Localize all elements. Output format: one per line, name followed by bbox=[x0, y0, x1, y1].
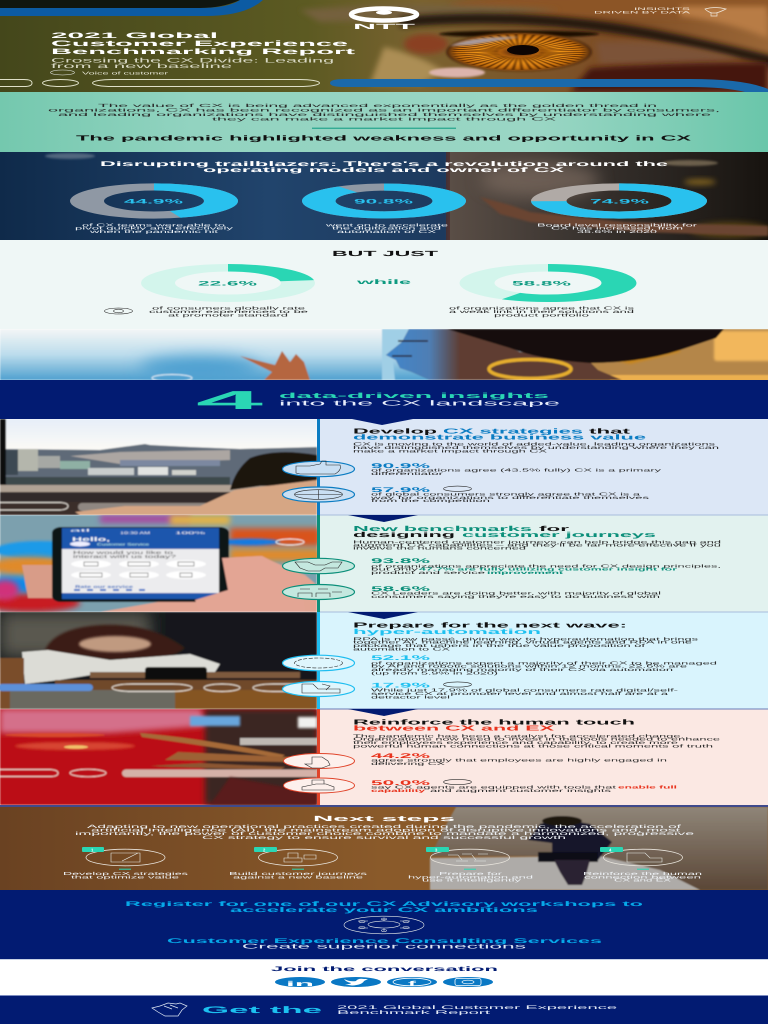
heading: Next steps bbox=[313, 814, 455, 823]
photo: hand on red car bbox=[0, 709, 322, 805]
blue arc bottom right bbox=[330, 79, 768, 92]
stat: 52.1%: by AI and robotic solutions within 12 months. 22.6% are bbox=[371, 664, 689, 669]
step 2 bbox=[229, 847, 367, 879]
stat: 50.0%: and augment customer insights bbox=[430, 788, 611, 793]
heading: New benchmarks bbox=[353, 524, 532, 533]
icon: self-service bbox=[282, 682, 354, 696]
intro text bbox=[48, 103, 720, 122]
heading bbox=[353, 426, 646, 441]
phone: Customer Service bbox=[97, 542, 149, 546]
panel: introduction bbox=[0, 92, 768, 152]
services name bbox=[167, 938, 603, 950]
icon: agent bbox=[284, 778, 354, 793]
stat: 50.0%: capability bbox=[371, 788, 427, 793]
stat: 52.1%: 52.1% bbox=[371, 655, 430, 662]
donut: 58.8% bbox=[477, 268, 619, 298]
donut: 90.8%: 90.8% bbox=[354, 198, 414, 206]
stat: 57.9%: from the competition bbox=[371, 498, 492, 503]
heading: demonstrate business value bbox=[353, 432, 646, 441]
step 4: Reinforce the human bbox=[583, 871, 704, 876]
panel: insight 4 bbox=[284, 708, 768, 805]
body text: artificial intelligence (AI), the mainstream adoption of disruptive innovations and, most bbox=[91, 827, 682, 833]
icon: gears bbox=[282, 655, 354, 671]
body text: augment CX capabilities – and they'll be far more effective if you bbox=[353, 542, 722, 548]
body text: make a market impact through CX bbox=[353, 448, 547, 453]
caption two: automation of CX bbox=[337, 229, 436, 234]
stat: 58.6%: consumers saying they're easy to do business with bbox=[371, 594, 662, 599]
panel: join the conversation bbox=[0, 959, 768, 995]
icon: network bbox=[344, 916, 424, 934]
subtitle bbox=[51, 58, 333, 68]
body text bbox=[353, 442, 720, 453]
donut: 90.8% bbox=[319, 187, 449, 215]
caption one: when the pandemic hit bbox=[90, 229, 220, 234]
body text bbox=[353, 539, 722, 551]
stat: 50.0%: enable full bbox=[618, 784, 677, 790]
body text: have distinguished themselves by understanding where they can bbox=[353, 445, 720, 450]
body text: CX is moving to the world of added-value, leading organizations bbox=[353, 442, 717, 446]
phone: How would you like to bbox=[73, 550, 174, 555]
photo: woman in profile bbox=[0, 329, 768, 384]
caption right: of organizations agree that CX is bbox=[449, 306, 634, 310]
connector word: while bbox=[354, 279, 412, 286]
step 4: connection between bbox=[584, 874, 703, 879]
body text: CX strategy to ensure survival and successful growth bbox=[202, 835, 567, 841]
heading bbox=[353, 620, 627, 636]
stat: 44.2% bbox=[371, 753, 669, 766]
subtitle: Crossing the CX Divide: Leading bbox=[51, 58, 335, 64]
phone: Rate our service bbox=[75, 584, 134, 589]
stat: 50.0%: 50.0% bbox=[371, 780, 430, 787]
heading: operating models and owner of CX bbox=[203, 167, 565, 174]
decorative pills bbox=[0, 684, 323, 692]
photo: phone in hand bbox=[0, 515, 320, 612]
stat: 93.8%: improvement bbox=[487, 570, 565, 575]
donut: 74.9% bbox=[549, 187, 689, 215]
services name: Customer Experience Consulting Services bbox=[167, 938, 603, 945]
phone: atl bbox=[70, 528, 91, 532]
stat: 57.9%: 57.9% bbox=[371, 487, 430, 494]
stat: 17.9%: 17.9% bbox=[371, 682, 430, 690]
body text: automation to CX bbox=[353, 646, 450, 651]
stat: 90.9%: of organizations agree (43.5% fully) CX is a primary bbox=[371, 468, 664, 473]
body text bbox=[353, 636, 700, 651]
body text bbox=[76, 824, 694, 840]
caption two: the digitization and bbox=[332, 226, 443, 231]
heading: Register for one of our CX Advisory workshops to bbox=[125, 901, 643, 908]
phone: interact with us today? bbox=[73, 554, 177, 559]
stat: 93.8%: of organizations appreciate the need for CX design principles, bbox=[371, 563, 721, 568]
caption two: went on to accelerate bbox=[326, 222, 450, 227]
phone bbox=[52, 527, 229, 602]
caption three: CX has increased, from bbox=[551, 226, 684, 231]
decorative pills bbox=[0, 80, 320, 86]
heading: that bbox=[589, 426, 632, 436]
body text: importantly, the power of customer choice combine to mandate a harmonized, progressive bbox=[75, 831, 695, 837]
photo: person walking by wall bbox=[430, 807, 768, 890]
heading bbox=[100, 161, 669, 174]
panel: footer download bbox=[0, 995, 768, 1024]
panel: disrupting trailblazers bbox=[0, 152, 768, 240]
heading: between CX and EX bbox=[353, 724, 555, 733]
stat: 17.9%: service CX at promoter level and almost half are at a bbox=[371, 691, 670, 696]
body text: their employees experience and capability, to create more bbox=[353, 740, 679, 745]
caption three: Board level responsibility for bbox=[537, 222, 699, 227]
heading: for bbox=[539, 524, 570, 533]
stat: 93.8%: product and service bbox=[371, 570, 487, 575]
stat: 90.9%: 90.9% bbox=[371, 463, 430, 470]
heading: Develop bbox=[353, 426, 439, 436]
stat: 17.9%: While just 17.9% of global consumers rate digital/self- bbox=[371, 688, 680, 693]
photo: woman at window bbox=[0, 419, 317, 515]
heading: customer journeys bbox=[462, 530, 656, 539]
caption right bbox=[449, 306, 636, 317]
panel: four insights banner bbox=[0, 380, 768, 419]
caption two bbox=[326, 223, 448, 233]
services name: Create superior connections bbox=[242, 944, 528, 950]
body text: involve the humans concerned bbox=[353, 546, 527, 551]
stat: 17.9%: detractor level bbox=[371, 694, 450, 699]
earring bbox=[489, 360, 571, 378]
donut: 58.8%: 58.8% bbox=[512, 280, 572, 288]
heading: hyper-automation bbox=[353, 627, 541, 636]
heading: BUT JUST bbox=[332, 249, 439, 258]
donut: 22.6% bbox=[158, 268, 298, 298]
stat: 90.9%: differentiator bbox=[371, 471, 445, 476]
NTT logo: NTT bbox=[353, 22, 417, 31]
panel: insight 3 bbox=[282, 612, 768, 709]
step 1: that optimize value bbox=[71, 874, 181, 879]
insights driven by data: INSIGHTS bbox=[634, 7, 692, 11]
heading: Disrupting trailblazers: There's a revolution around the bbox=[100, 161, 669, 168]
banner text: into the CX landscape bbox=[279, 398, 560, 408]
body text bbox=[353, 733, 721, 748]
step 1 bbox=[63, 847, 188, 879]
banner text: data-driven insights bbox=[279, 391, 549, 400]
heading: Prepare for the next wave: bbox=[353, 620, 627, 629]
stat: 90.9% bbox=[371, 463, 664, 476]
heading bbox=[353, 524, 656, 539]
heading: Join the conversation bbox=[271, 966, 498, 973]
icon: twitter bbox=[331, 977, 381, 987]
caption left: at promoter standard bbox=[168, 312, 290, 317]
step 1: 1 bbox=[91, 847, 94, 852]
head wrap bbox=[447, 329, 724, 363]
phone: 100% bbox=[175, 531, 205, 535]
subtitle: from a new baseline bbox=[51, 63, 233, 70]
step 3: hyper-automation and bbox=[408, 874, 535, 879]
caption three: 35.6% in 2020 bbox=[577, 229, 659, 234]
icon: pointing hand bbox=[284, 754, 354, 768]
stat: 57.9% bbox=[371, 486, 649, 503]
body text: Human-centered customer journeys can help bridge this gap and bbox=[353, 539, 722, 544]
caption right: product portfolio bbox=[494, 312, 591, 317]
stat: 44.2%: agree strongly that employees are highly engaged in bbox=[371, 758, 669, 763]
icon: handshake bbox=[282, 558, 354, 574]
heading: designing bbox=[353, 530, 455, 539]
stat: 58.6%: CX Leaders are doing better, with majority of global bbox=[371, 590, 661, 595]
stat: 58.6%: 58.6% bbox=[371, 586, 430, 593]
stat: 44.2%: delivering CX bbox=[371, 761, 445, 766]
eye photograph bbox=[300, 0, 768, 92]
step 2: 2 bbox=[263, 847, 266, 852]
icon: globe bbox=[282, 487, 354, 502]
banner text bbox=[279, 391, 560, 408]
voice of customer tag: Voice of customer bbox=[82, 70, 170, 75]
photo: woman at laptop bbox=[0, 612, 323, 709]
body text: RPA is now passé, giving way to hyperautomation that brings bbox=[353, 636, 700, 642]
stat: 93.8%: 93.8% bbox=[371, 558, 430, 565]
hand bbox=[240, 351, 310, 380]
heading bbox=[125, 901, 643, 914]
intro text: and leading organizations have distinguished themselves by understanding where bbox=[58, 112, 713, 117]
big number: 4 bbox=[196, 385, 265, 415]
caption left bbox=[149, 306, 310, 317]
icon: facebook bbox=[387, 977, 437, 988]
step 3: 3 bbox=[435, 847, 438, 852]
icon: instagram bbox=[443, 977, 493, 987]
icon: people group bbox=[282, 584, 354, 600]
caption one: of CX teams were able to bbox=[82, 222, 227, 227]
stat: 93.8% bbox=[371, 558, 721, 575]
stat: 93.8%: but only bbox=[371, 567, 421, 572]
icon: linkedin bbox=[275, 977, 325, 988]
heading bbox=[353, 717, 635, 733]
stat: 52.1%: already managing majority of their CX via automation bbox=[371, 667, 675, 672]
phone: 10:30 AM bbox=[120, 531, 150, 535]
step 4 bbox=[583, 847, 704, 883]
icon: hand click bbox=[152, 1003, 187, 1016]
caption one: pivot quickly and effectively bbox=[75, 226, 236, 231]
title: Customer Experience bbox=[51, 39, 350, 48]
report name: Benchmark Report bbox=[337, 1010, 492, 1016]
heading: accelerate your CX ambitions bbox=[230, 907, 539, 914]
intro text: they can make a market impact through CX bbox=[212, 116, 556, 122]
panel: but just bbox=[0, 240, 768, 329]
icon: voice of customer bbox=[104, 308, 132, 314]
title: Benchmarking Report bbox=[51, 47, 356, 56]
panel: next steps bbox=[0, 807, 768, 890]
icon: cup bbox=[705, 8, 726, 16]
stat: 93.8%: 47.7% are fully utilizing customer insight for bbox=[419, 567, 678, 572]
step 1: Develop CX strategies bbox=[63, 871, 188, 876]
body text: Adapting to new operational practices created during the pandemic, the acceleration of bbox=[87, 824, 683, 830]
NTT logo bbox=[351, 8, 417, 31]
insights driven by data bbox=[594, 8, 690, 14]
report name bbox=[337, 1005, 617, 1016]
caption left: of consumers globally rate bbox=[152, 306, 307, 310]
step 2: against a new baseline bbox=[233, 874, 365, 879]
step 3: Prepare for bbox=[439, 871, 504, 876]
heading: CX strategies bbox=[443, 426, 583, 436]
stat: 52.1%: (up from 5.9% in 2020) bbox=[371, 670, 500, 675]
stat: 17.9% bbox=[371, 682, 680, 699]
stat: 50.0% bbox=[371, 779, 677, 793]
caption left: customer experiences to be bbox=[149, 309, 310, 314]
stat: 57.9%: of global consumers strongly agree that CX is a bbox=[371, 492, 642, 497]
get the link: Get the bbox=[202, 1005, 322, 1016]
insights driven by data: DRIVEN BY DATA bbox=[594, 10, 692, 14]
face bbox=[386, 329, 622, 380]
heading: Reinforce the human touch bbox=[353, 717, 635, 726]
stat: 57.9%: way for organizations to differentiate themselves bbox=[371, 495, 649, 500]
step 3: use it intelligently bbox=[422, 878, 524, 883]
donut: 22.6%: 22.6% bbox=[198, 280, 258, 288]
donut: 44.9% bbox=[87, 187, 221, 215]
stat: 52.1% bbox=[371, 655, 719, 675]
phone: Hello, bbox=[72, 537, 111, 543]
stat: 44.2%: 44.2% bbox=[371, 753, 430, 760]
blue arc top left bbox=[0, 0, 240, 8]
voice of customer tag bbox=[50, 70, 170, 75]
body text: The pandemic has been a catalyst for accelerated change. bbox=[353, 733, 684, 738]
icon: linkedin: in bbox=[286, 980, 314, 988]
stat: 58.6% bbox=[371, 586, 662, 599]
body text: Organizations now need to invest in the tools needed to enhance bbox=[353, 737, 721, 742]
title bbox=[51, 31, 356, 56]
stat: 52.1%: of organizations expect a majority of their CX to be managed bbox=[371, 660, 719, 665]
panel: insight 1 bbox=[282, 419, 768, 515]
body text: together AI, machine learning, virtual agents and RPA in one bbox=[353, 640, 693, 645]
caption one bbox=[75, 222, 236, 234]
intro heading: The pandemic highlighted weakness and opportunity in CX bbox=[76, 134, 691, 142]
caption right: a weak link in their solutions and bbox=[449, 309, 636, 314]
body text: package that ushers in the true value proposition of bbox=[353, 643, 647, 648]
icon: facebook: f bbox=[408, 981, 419, 988]
body text: powerful human connections at those critical moments of truth bbox=[353, 743, 714, 748]
step 4: 4 bbox=[609, 847, 612, 852]
header banner bbox=[0, 0, 768, 92]
step 4: CX and EX bbox=[614, 878, 671, 883]
report name: 2021 Global Customer Experience bbox=[337, 1005, 617, 1011]
step 3 bbox=[408, 847, 535, 883]
intro text: organizations, CX has been recognized as an important differentiator by consumers, bbox=[48, 108, 720, 112]
title: 2021 Global bbox=[51, 31, 218, 40]
step 2: Build customer journeys bbox=[229, 871, 367, 876]
donut: 44.9%: 44.9% bbox=[124, 198, 184, 206]
caption three bbox=[538, 223, 697, 233]
icon: thumbs up bbox=[282, 461, 354, 477]
panel: insight 2 bbox=[282, 514, 768, 612]
stat: 50.0%: say CX agents are equipped with tools that bbox=[371, 784, 618, 790]
panel: register call to action bbox=[0, 890, 768, 959]
donut: 74.9%: 74.9% bbox=[590, 198, 650, 206]
intro text: The value of CX is being advanced exponentially as the golden thread in bbox=[98, 103, 659, 108]
